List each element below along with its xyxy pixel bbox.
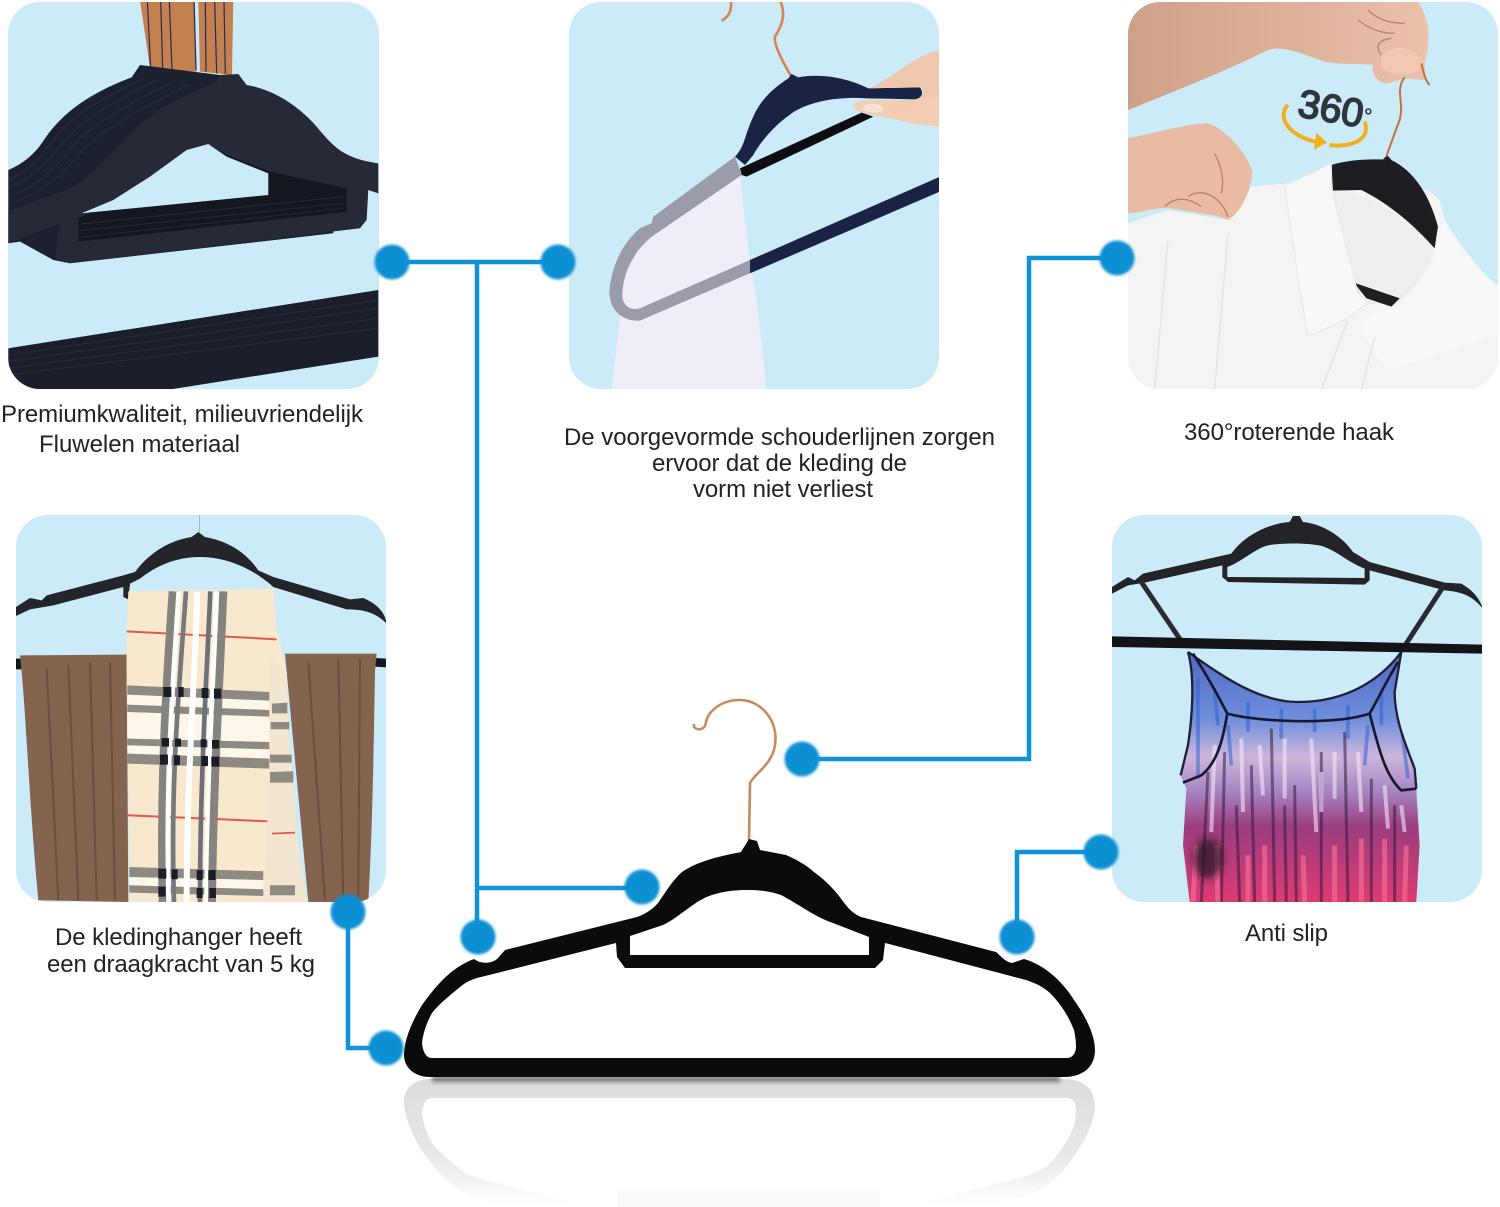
copper string hook bbox=[1386, 63, 1430, 157]
copper hooks bbox=[140, 0, 233, 75]
white shirt bbox=[1128, 163, 1499, 390]
brown trousers right bbox=[285, 654, 377, 902]
navy hanger shoulder bbox=[735, 74, 922, 165]
caption: shoulder lines: vorm niet verliest bbox=[693, 476, 873, 503]
360 label: ° bbox=[1364, 104, 1373, 129]
white shirt bbox=[612, 170, 767, 390]
connector dots bbox=[330, 240, 1134, 1066]
caption: anti slip: Anti slip bbox=[1245, 920, 1328, 947]
hook bbox=[722, 0, 791, 76]
caption: shoulder lines bbox=[564, 424, 995, 503]
caption: premium quality bbox=[1, 401, 364, 458]
tie-dye dress bbox=[1181, 652, 1420, 902]
panel: premium velvet hangers bbox=[8, 0, 379, 390]
panel: preformed shoulder lines bbox=[569, 0, 940, 390]
connector: load capacity bbox=[348, 912, 386, 1048]
panel: 360 degree rotating hook bbox=[1128, 2, 1499, 390]
caption: load capacity: De kledinghanger heeft bbox=[55, 924, 302, 951]
front hanger bbox=[8, 74, 378, 263]
thread bbox=[199, 515, 200, 532]
fist bbox=[1128, 123, 1252, 220]
velvet body bbox=[404, 839, 1095, 1077]
lower bar bbox=[8, 290, 378, 390]
hand bbox=[853, 51, 940, 127]
caption: premium quality: Fluwelen materiaal bbox=[39, 431, 240, 458]
connector: quality and shoulder bbox=[392, 262, 642, 937]
black bar bbox=[740, 113, 873, 177]
connector: rotating hook bbox=[802, 258, 1117, 759]
black hanger bbox=[1331, 159, 1438, 248]
bar bbox=[16, 658, 386, 669]
plaid scarf bbox=[127, 589, 307, 902]
bar bbox=[1112, 636, 1483, 654]
caption: shoulder lines: De voorgevormde schouderlijnen zorgen bbox=[564, 424, 995, 451]
caption: load capacity bbox=[47, 924, 315, 978]
caption: shoulder lines: ervoor dat de kleding de bbox=[652, 450, 907, 477]
brown trousers left bbox=[20, 655, 128, 902]
360 label: 360 bbox=[1295, 82, 1367, 136]
grey hanger through shirt bbox=[609, 157, 750, 321]
caption: premium quality: Premiumkwaliteit, milieuvriendelijk bbox=[1, 401, 364, 428]
reflection of main hanger bbox=[404, 1079, 1095, 1207]
copper hook bbox=[694, 700, 776, 840]
stacked hangers behind bbox=[8, 65, 333, 263]
shadow under hanger bbox=[432, 1076, 1060, 1082]
caption: rotating hook: 360°roterende haak bbox=[1184, 419, 1395, 446]
main hanger bbox=[404, 700, 1095, 1077]
caption: load capacity: een draagkracht van 5 kg bbox=[47, 951, 315, 978]
rotation arrows bbox=[1284, 105, 1366, 150]
opening with sky bbox=[78, 144, 347, 242]
navy lower bar bbox=[750, 177, 940, 273]
straps bbox=[1141, 582, 1443, 649]
connector: anti slip bbox=[1017, 852, 1101, 937]
reflected inner bar, faint bbox=[618, 1188, 880, 1207]
panel: anti slip bbox=[1112, 515, 1483, 902]
hanger bbox=[16, 532, 387, 624]
hanger bbox=[1112, 516, 1483, 609]
upper arm and hand bbox=[1128, 2, 1429, 110]
panel: load capacity bbox=[16, 515, 387, 902]
shirt inside bbox=[1333, 192, 1435, 305]
collar bbox=[1285, 163, 1368, 337]
360 label bbox=[1298, 90, 1372, 127]
